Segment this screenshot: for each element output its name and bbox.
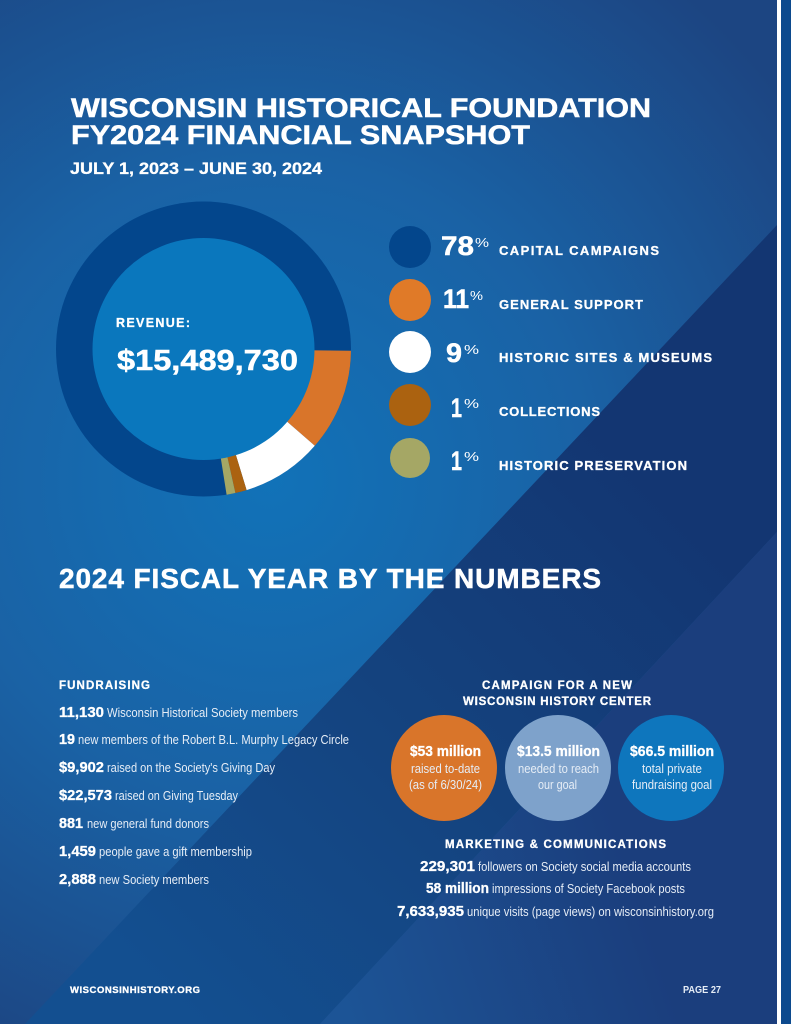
title — [71, 93, 651, 150]
legend: general support: GENERAL SUPPORT — [499, 297, 643, 312]
legend: general support — [389, 279, 643, 321]
stat: general fund donors: new general fund donors — [87, 817, 209, 831]
lower diagonal panel — [320, 532, 777, 1024]
stat: legacy circle: new members of the Robert B.L. Murphy Legacy Circle — [78, 733, 349, 747]
stat: giving tuesday: raised on Giving Tuesday — [115, 789, 239, 803]
circle: needed to reach goal — [505, 715, 611, 821]
circle: total goal: $66.5 million — [630, 743, 714, 760]
circle: raised to date — [391, 715, 497, 821]
legend: capital campaigns: 78 — [441, 231, 474, 261]
diagonal band — [25, 225, 777, 1024]
stat: impressions: impressions of Society Facebook posts — [492, 882, 685, 896]
stat: general fund donors — [59, 815, 209, 832]
title: FY2024 FINANCIAL SNAPSHOT — [71, 120, 530, 150]
legend: capital campaigns: CAPITAL CAMPAIGNS — [499, 243, 659, 258]
legend: general support: 11 — [443, 284, 469, 314]
title: WISCONSIN HISTORICAL FOUNDATION — [71, 93, 651, 123]
stat: general fund donors: 881 — [59, 815, 83, 832]
revenue amount: $15,489,730 — [117, 345, 298, 377]
legend: general support: % — [470, 288, 483, 303]
circle: needed to reach goal: $13.5 million — [517, 743, 600, 760]
stat: followers: 229,301 — [420, 858, 475, 875]
stat: unique visits: 7,633,935 — [397, 903, 464, 920]
legend: capital campaigns — [389, 226, 659, 268]
stat: gift membership: 1,459 — [59, 843, 96, 860]
campaign heading — [463, 680, 652, 708]
footer: website: WISCONSINHISTORY.ORG — [70, 985, 200, 996]
donut chart: revenue — [56, 202, 351, 496]
stat: impressions — [426, 880, 685, 897]
stat: members: Wisconsin Historical Society members — [107, 706, 298, 720]
circle: raised to date: $53 million — [410, 743, 481, 760]
circle: total goal — [618, 715, 724, 821]
stat: giving day: $9,902 — [59, 759, 104, 776]
revenue label: REVENUE: — [116, 316, 190, 330]
stat: legacy circle: 19 — [59, 731, 75, 748]
legend: collections: 1 — [451, 393, 462, 423]
stat: giving day: raised on the Society's Giving Day — [107, 761, 276, 775]
legend: collections — [389, 384, 600, 426]
stat: giving day — [59, 759, 276, 776]
stat: gift membership — [59, 843, 252, 860]
panel: fundraising — [59, 680, 349, 888]
right edge strip — [777, 0, 791, 1024]
circle: needed to reach goal: our goal — [538, 778, 577, 792]
stat: giving tuesday — [59, 787, 239, 804]
marketing heading: MARKETING & COMMUNICATIONS — [445, 839, 666, 851]
footer: page number: PAGE 27 — [683, 985, 721, 996]
legend: historic preservation: 1 — [451, 446, 462, 476]
stat: unique visits: unique visits (page views) on wisconsinhistory.org — [467, 905, 714, 919]
legend: collections: COLLECTIONS — [499, 404, 600, 419]
stat: followers — [420, 858, 691, 875]
stat: unique visits — [397, 903, 714, 920]
legend: historic preservation: HISTORIC PRESERVATION — [499, 458, 687, 473]
circle: raised to date: (as of 6/30/24) — [409, 778, 482, 792]
stat: followers: followers on Society social media accounts — [478, 860, 691, 874]
circle: total goal: total private — [642, 762, 702, 776]
legend: historic sites and museums: 9 — [446, 338, 462, 368]
stat: members: 11,130 — [59, 704, 104, 721]
section heading: 2024 FISCAL YEAR BY THE NUMBERS — [59, 563, 601, 594]
circle: needed to reach goal: needed to reach — [518, 762, 599, 776]
legend: historic preservation: % — [464, 449, 480, 464]
stat: gift membership: people gave a gift membership — [99, 845, 252, 859]
stat: new members — [59, 871, 209, 888]
legend: collections: % — [464, 396, 480, 411]
fundraising heading: FUNDRAISING — [59, 680, 150, 692]
stat: new members: new Society members — [99, 873, 209, 887]
panel: marketing and communications — [397, 839, 714, 920]
stat: giving tuesday: $22,573 — [59, 787, 112, 804]
campaign heading: CAMPAIGN FOR A NEW — [482, 680, 632, 692]
campaign heading: WISCONSIN HISTORY CENTER — [463, 696, 652, 708]
legend: capital campaigns: % — [475, 235, 490, 250]
date range: JULY 1, 2023 – JUNE 30, 2024 — [70, 160, 323, 178]
stat: new members: 2,888 — [59, 871, 96, 888]
panel: campaign — [391, 680, 724, 821]
circle: raised to date: raised to-date — [411, 762, 480, 776]
legend: historic preservation — [390, 438, 687, 478]
stat: impressions: 58 million — [426, 880, 489, 897]
legend: historic sites and museums: % — [464, 342, 480, 357]
circle: total goal: fundraising goal — [632, 778, 712, 792]
legend: historic sites and museums — [389, 331, 712, 373]
legend: historic sites and museums: HISTORIC SITES & MUSEUMS — [499, 350, 712, 365]
stat: members — [59, 704, 298, 721]
